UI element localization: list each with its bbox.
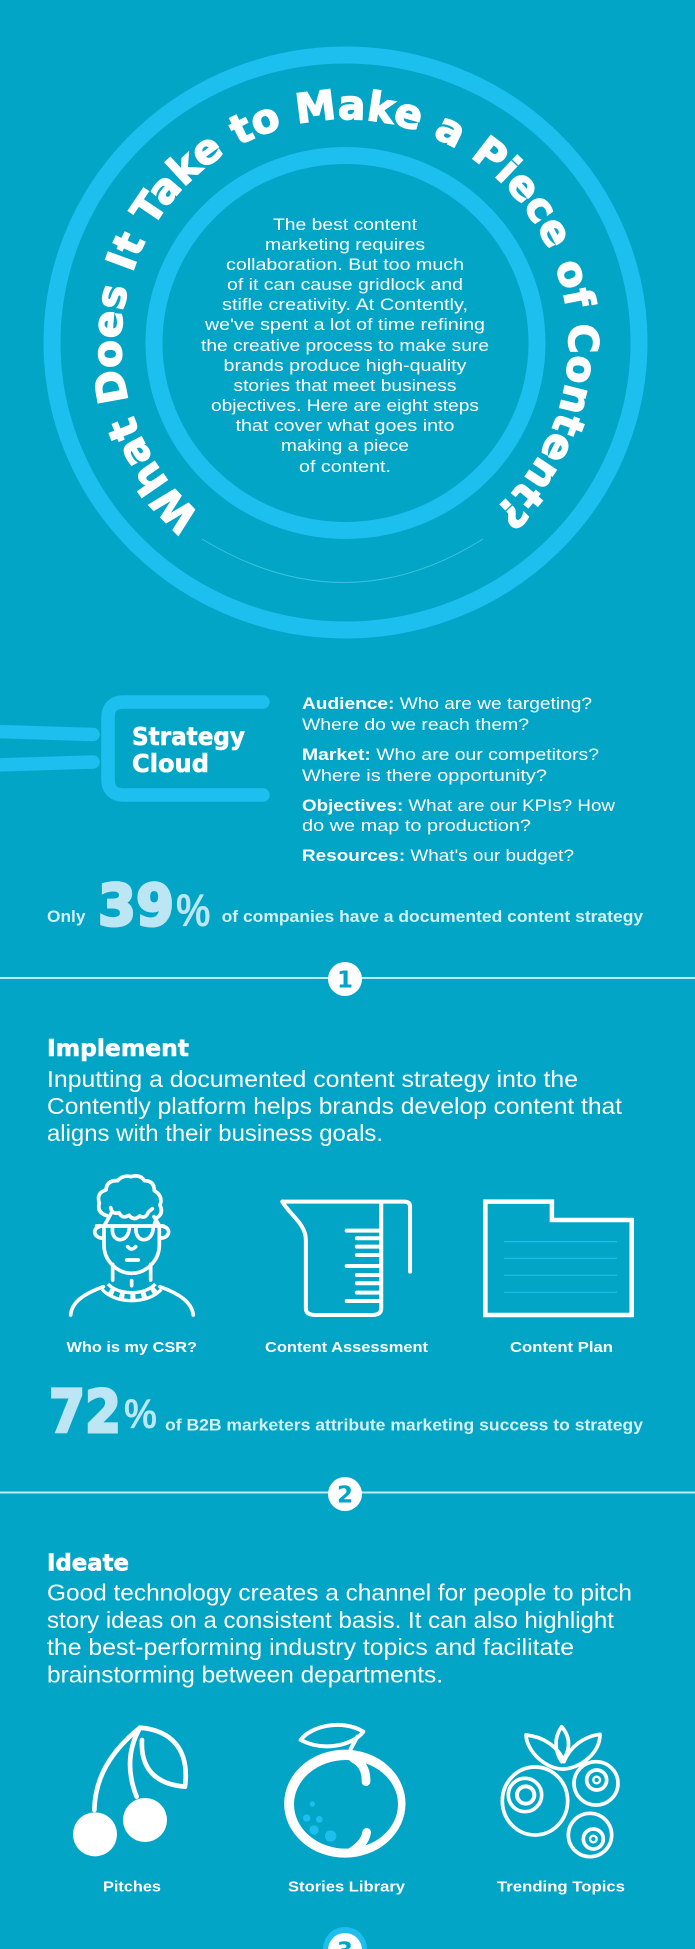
ideate body text: Good technology creates a channel for people to pitch xyxy=(47,1580,632,1606)
inner ring xyxy=(154,156,537,530)
ideate body text xyxy=(47,1580,632,1688)
icon labels: Content Assessment xyxy=(265,1339,428,1356)
divider: step 1: 1 xyxy=(337,968,353,994)
intro paragraph: of content. xyxy=(299,458,391,476)
strategy cloud heading: Cloud xyxy=(132,749,209,778)
icon: folder content plan xyxy=(485,1202,632,1315)
intro paragraph: brands produce high-quality xyxy=(224,357,467,375)
intro paragraph: collaboration. But too much xyxy=(226,256,464,274)
stat: 39 percent: 39 xyxy=(98,873,174,939)
stat: 72 percent: % xyxy=(124,1390,157,1437)
icon labels: Trending Topics xyxy=(497,1878,625,1896)
divider: step 1 xyxy=(0,962,695,996)
stat: 39 percent: of companies have a documented content strategy xyxy=(222,907,644,926)
implement heading: Implement xyxy=(47,1034,189,1062)
strategy questions: Market: Who are our competitors? xyxy=(302,745,599,764)
intro paragraph: of it can cause gridlock and xyxy=(227,276,463,294)
intro paragraph: stifle creativity. At Contently, xyxy=(222,296,468,314)
panel: implement xyxy=(47,1034,632,1356)
ideate body text: brainstorming between departments. xyxy=(47,1662,443,1688)
icon labels xyxy=(66,1339,613,1356)
icon: berries xyxy=(502,1727,618,1857)
implement body text: aligns with their business goals. xyxy=(47,1120,383,1146)
icon: measuring beaker xyxy=(282,1202,410,1315)
intro paragraph: stories that meet business xyxy=(234,377,456,395)
intro paragraph: we've spent a lot of time refining xyxy=(204,316,485,334)
icon labels: Content Plan xyxy=(510,1339,613,1356)
panel: ideate xyxy=(47,1548,632,1896)
stat: 72 percent xyxy=(49,1377,644,1446)
strategy cloud heading: Strategy xyxy=(132,722,245,751)
intro paragraph: that cover what goes into xyxy=(236,417,454,435)
ideate heading: Ideate xyxy=(47,1548,129,1576)
intro paragraph xyxy=(201,216,489,476)
divider: step 2 xyxy=(0,1477,695,1511)
badge: step 3 xyxy=(323,1927,367,1949)
strategy questions: do we map to production? xyxy=(302,816,531,835)
stat: 39 percent: % xyxy=(176,884,210,936)
outer ring xyxy=(52,55,639,630)
stat: 72 percent: of B2B marketers attribute marketing success to strategy xyxy=(165,1416,644,1434)
intro paragraph: making a piece xyxy=(281,437,409,455)
stat: 39 percent xyxy=(47,873,644,939)
icon: peach xyxy=(284,1725,405,1858)
panel: title circle xyxy=(44,46,648,638)
icon labels: Pitches xyxy=(103,1878,161,1896)
strategy questions: Objectives: What are our KPIs? How xyxy=(302,796,616,815)
intro paragraph: marketing requires xyxy=(265,236,425,254)
ideate body text: story ideas on a consistent basis. It can also highlight xyxy=(47,1607,615,1633)
implement body text xyxy=(47,1066,623,1146)
strategy questions: Audience: Who are we targeting? xyxy=(302,694,592,713)
icon labels xyxy=(103,1878,625,1896)
strategy questions: Where do we reach them? xyxy=(302,715,529,734)
ideate body text: the best-performing industry topics and facilitate xyxy=(47,1634,574,1660)
strategy questions xyxy=(302,694,616,865)
intro paragraph: The best content xyxy=(273,216,417,234)
implement body text: Contently platform helps brands develop content that xyxy=(47,1093,623,1119)
curved title: What Does It Take to Make a Piece of Content? xyxy=(95,88,600,536)
panel: strategy cloud xyxy=(0,694,616,865)
stat: 39 percent: Only xyxy=(47,907,86,926)
intro paragraph: objectives. Here are eight steps xyxy=(211,397,479,415)
stat: 72 percent: 72 xyxy=(49,1377,121,1446)
divider: step 2: 2 xyxy=(337,1482,353,1508)
icon labels: Stories Library xyxy=(288,1878,406,1896)
thin bottom arc xyxy=(202,539,483,582)
bracket with connector lines xyxy=(0,702,263,795)
icon labels: Who is my CSR? xyxy=(66,1339,197,1356)
strategy questions: Resources: What's our budget? xyxy=(302,846,574,865)
strategy questions: Where is there opportunity? xyxy=(302,766,547,785)
icon: cherries xyxy=(73,1728,186,1856)
implement body text: Inputting a documented content strategy into the xyxy=(47,1066,578,1092)
strategy cloud heading xyxy=(132,722,245,778)
icon: person with glasses xyxy=(71,1176,193,1315)
intro paragraph: the creative process to make sure xyxy=(201,337,489,355)
